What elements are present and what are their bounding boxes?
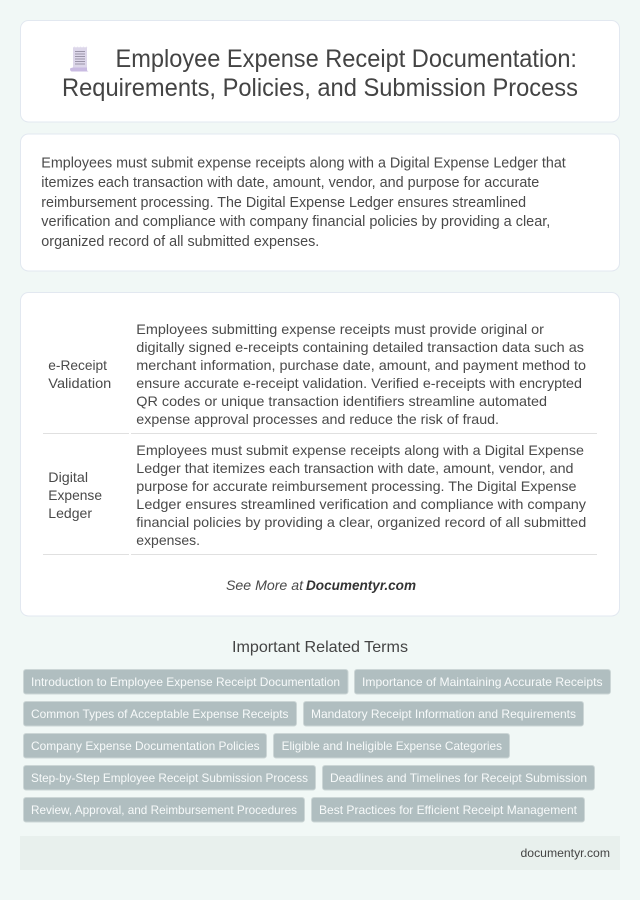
chip: [274, 734, 510, 758]
intro paragraph: verification and compliance with company financial policies by providing a clear,: [41, 214, 550, 230]
chip: [312, 798, 584, 822]
panel: details table: [20, 292, 620, 616]
chip: [354, 670, 610, 694]
title: Employee Expense Receipt Documentation:: [116, 45, 577, 73]
chip: [24, 734, 266, 758]
row description: Employees must submit expense receipts along with a Digital Expense: [136, 442, 584, 458]
chip: Review, Approval, and Reimbursement Procedures: [31, 803, 297, 817]
title: Requirements, Policies, and Submission Process: [62, 74, 578, 102]
chip: Best Practices for Efficient Receipt Management: [319, 803, 578, 817]
chip: Common Types of Acceptable Expense Receipts: [31, 707, 288, 721]
row description: merchant information, purchase date, amount, and payment method to: [136, 357, 586, 373]
row description: digitally signed e-receipts containing detailed transaction data such as: [136, 339, 584, 355]
heading: related terms: Important Related Terms: [232, 639, 408, 656]
row description: [136, 442, 586, 548]
footer bar: documentyr.com: [520, 846, 610, 860]
row label: Digital: [48, 469, 88, 485]
row description: financial policies by providing a clear, organized record of all submitted: [136, 514, 586, 530]
chip: Deadlines and Timelines for Receipt Submission: [330, 771, 587, 785]
row description: QR codes or unique transaction identifiers streamline automated: [136, 393, 547, 409]
intro paragraph: organized record of all submitted expenses.: [41, 234, 319, 250]
row description: purpose for accurate reimbursement processing. The Digital Expense: [136, 478, 577, 494]
row description: Ledger that itemizes each transaction with date, amount, vendor, and: [136, 460, 574, 476]
chip: [322, 766, 594, 790]
chip: Introduction to Employee Expense Receipt Documentation: [31, 675, 340, 689]
row: Digital Expense Ledger: [43, 442, 597, 554]
icon: receipt: [70, 46, 89, 72]
row description: expenses.: [136, 532, 200, 548]
row label: e-Receipt: [48, 357, 107, 373]
chip: Mandatory Receipt Information and Requirements: [311, 707, 576, 721]
row description: [136, 321, 586, 427]
row label: [48, 357, 111, 391]
panel: header: [20, 20, 620, 122]
chip: [24, 766, 316, 790]
panel: introduction: [20, 134, 620, 271]
chip: Eligible and Ineligible Expense Categories: [282, 739, 502, 753]
related terms chips: [24, 670, 610, 822]
chip: Company Expense Documentation Policies: [31, 739, 260, 753]
chip: [24, 702, 296, 726]
intro paragraph: [41, 156, 566, 250]
chip: Importance of Maintaining Accurate Receipts: [362, 675, 602, 689]
intro paragraph: reimbursement processing. The Digital Expense Ledger ensures streamlined: [41, 195, 526, 211]
chip: [304, 702, 584, 726]
row label: [48, 469, 102, 521]
chip: [24, 798, 304, 822]
intro paragraph: Employees must submit expense receipts along with a Digital Expense Ledger that: [41, 156, 566, 172]
row label: Expense: [48, 487, 102, 503]
title: [62, 45, 578, 102]
chip: Step-by-Step Employee Receipt Submission Process: [31, 771, 308, 785]
row description: ensure accurate e-receipt validation. Verified e-receipts with encrypted: [136, 375, 582, 391]
intro paragraph: itemizes each transaction with date, amount, vendor, and purpose for accurate: [41, 175, 539, 191]
see more link: See More at: [226, 577, 304, 593]
row: e-Receipt Validation: [43, 321, 597, 434]
row description: expense approval processes and reduce the risk of fraud.: [136, 411, 499, 427]
see more link: Documentyr.com: [306, 577, 416, 593]
row description: Ledger ensures streamlined verification and compliance with company: [136, 496, 586, 512]
footer bar: [20, 836, 620, 870]
row description: Employees submitting expense receipts must provide original or: [136, 321, 544, 337]
row label: Validation: [48, 375, 111, 391]
row label: Ledger: [48, 505, 92, 521]
see more link: [226, 577, 416, 593]
chip: [24, 670, 348, 694]
